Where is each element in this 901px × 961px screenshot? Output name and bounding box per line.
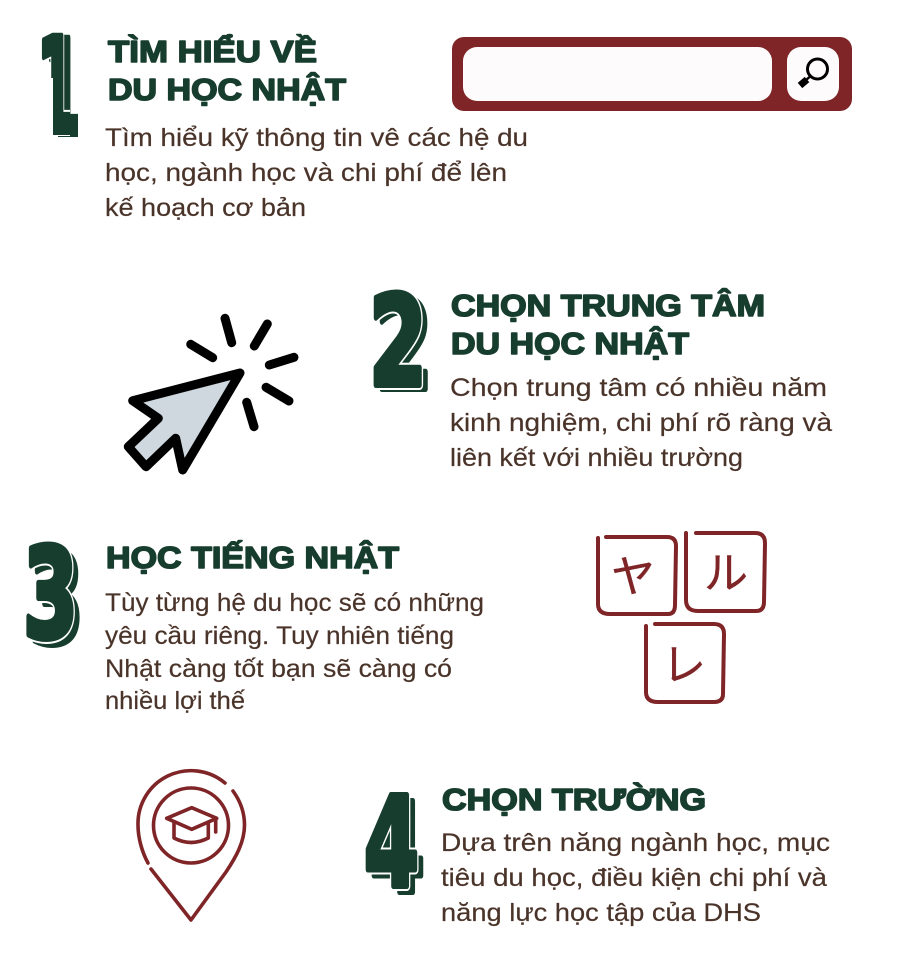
step 4 text <box>441 829 830 927</box>
icon: mouse cursor click <box>128 318 294 470</box>
icon: graduation cap location pin <box>138 771 244 920</box>
step 1 heading <box>108 34 346 107</box>
step 2 heading <box>451 287 765 361</box>
step 3 text: nhiều lợi thế <box>105 687 245 715</box>
text: 1 <box>37 10 75 164</box>
step 4 text: tiêu du học, điều kiện chi phí và <box>441 864 827 892</box>
step 2 text: kinh nghiệm, chi phí rõ ràng và <box>450 409 832 437</box>
icon: katakana tiles: レ <box>662 641 706 690</box>
step 3 heading: HỌC TIẾNG NHẬT <box>106 539 399 575</box>
step 4 number: 4 <box>364 771 419 916</box>
step 1 heading: DU HỌC NHẬT <box>108 71 346 107</box>
step 3 number: 3 <box>23 522 78 667</box>
step 2 text: Chọn trung tâm có nhiều năm <box>450 374 827 402</box>
step 3 number <box>23 522 84 673</box>
step 3 text: yêu cầu riêng. Tuy nhiên tiếng <box>105 622 454 650</box>
step 4 number: 4 <box>370 777 425 922</box>
step 1 heading: TÌM HIỂU VỀ <box>108 34 317 69</box>
step 2 text: liên kết với nhiều trường <box>450 444 743 472</box>
icon: search bar <box>452 37 852 111</box>
step 1 text: học, ngành học và chi phí để lên <box>105 159 507 187</box>
step 1 text: kế hoạch cơ bản <box>105 194 306 222</box>
text: 1 <box>44 12 82 166</box>
step 1 number <box>42 32 78 137</box>
step 3 text <box>105 589 484 715</box>
step 2 number: 2 <box>375 274 433 419</box>
icon: katakana tiles <box>598 533 765 702</box>
step 3 number: 3 <box>29 528 84 673</box>
step 2 heading: CHỌN TRUNG TÂM <box>451 287 765 323</box>
step 4 number: 4 <box>364 771 419 916</box>
step 4 text: Dựa trên năng ngành học, mục <box>441 829 830 857</box>
step 4 number <box>364 771 425 922</box>
step 4 text: năng lực học tập của DHS <box>441 899 761 927</box>
step 3 number: 3 <box>23 522 78 667</box>
step 2 number: 2 <box>369 270 427 415</box>
text: 1 <box>37 10 75 164</box>
step 2 heading: DU HỌC NHẬT <box>451 325 689 361</box>
step 4 heading: CHỌN TRƯỜNG <box>442 781 706 817</box>
step 2 text <box>450 374 832 472</box>
step 2 number: 2 <box>369 270 427 415</box>
step 3 text: Tùy từng hệ du học sẽ có những <box>105 589 484 617</box>
step 1 text <box>105 124 528 222</box>
icon: katakana tiles: ヤ <box>611 553 655 602</box>
icon: katakana tiles: ル <box>704 549 748 598</box>
step 3 text: Nhật càng tốt bạn sẽ càng có <box>105 655 452 683</box>
step 1 text: Tìm hiểu kỹ thông tin vê các hệ du <box>105 124 528 152</box>
